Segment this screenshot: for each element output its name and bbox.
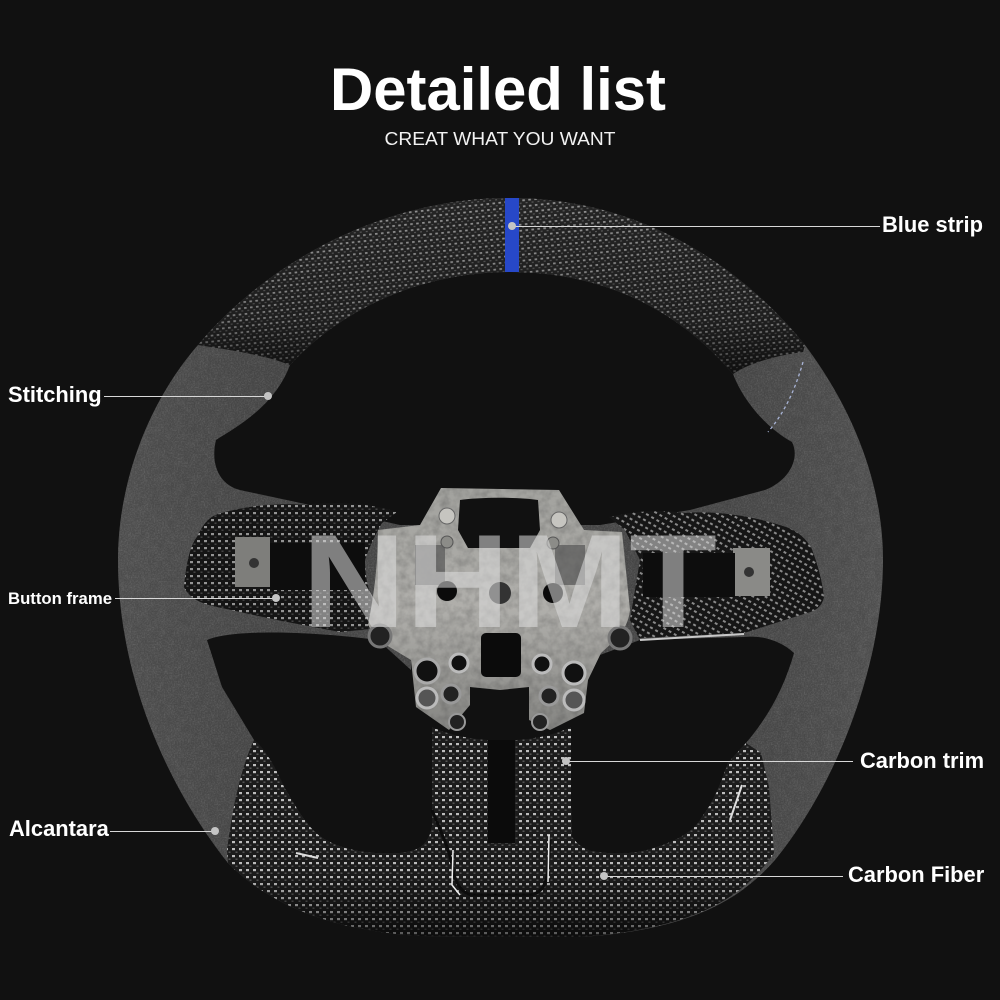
alcantara rim xyxy=(118,198,883,938)
top carbon fiber band xyxy=(198,198,805,374)
label: stitching: Stitching xyxy=(8,382,102,407)
title: Detailed list xyxy=(330,56,666,123)
NHMT watermark: NHMT xyxy=(302,508,717,656)
label: carbon trim: Carbon trim xyxy=(860,748,984,773)
subtitle: CREAT WHAT YOU WANT xyxy=(384,129,616,149)
lower center opening xyxy=(411,650,591,745)
label: button frame: Button frame xyxy=(8,589,112,608)
label: carbon trim xyxy=(562,748,984,773)
steering wheel xyxy=(118,198,883,938)
label: alcantara xyxy=(9,816,219,841)
left button frame xyxy=(184,503,397,632)
right button frame xyxy=(609,511,824,640)
label: carbon fiber xyxy=(600,862,985,887)
label: button frame xyxy=(8,589,280,608)
stitching xyxy=(768,362,803,432)
lower left opening xyxy=(207,632,432,853)
label: carbon fiber: Carbon Fiber xyxy=(848,862,985,887)
label: blue strip: Blue strip xyxy=(882,212,983,237)
label: blue strip xyxy=(508,212,983,237)
upper opening xyxy=(214,272,795,525)
label: stitching xyxy=(8,382,272,407)
bottom carbon fiber xyxy=(227,727,774,937)
center metal hub xyxy=(368,488,631,733)
blue strip xyxy=(505,198,519,272)
label: alcantara: Alcantara xyxy=(9,816,110,841)
lower right opening xyxy=(571,637,794,853)
